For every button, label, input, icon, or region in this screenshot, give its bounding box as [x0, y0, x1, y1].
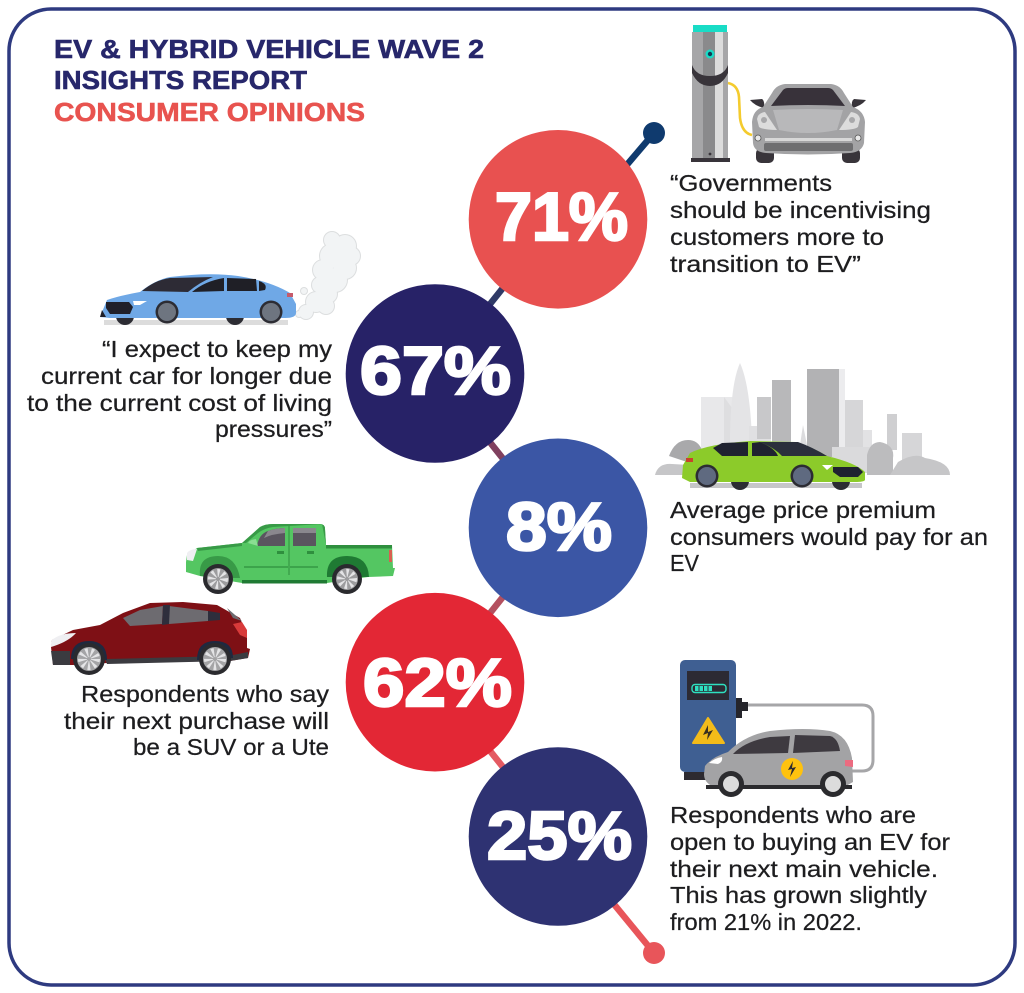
text: keep current car quote: pressures” — [215, 416, 332, 442]
text: average price premium: EV — [670, 550, 700, 576]
blue car — [100, 274, 296, 325]
text: keep current car quote: current car for longer due — [41, 363, 332, 389]
stat circle: 62% — [346, 593, 524, 772]
city skyline — [655, 363, 950, 475]
hatchback car — [704, 729, 853, 797]
icon: charging post with front-view grey car — [691, 25, 866, 163]
text: governments quote: transition to EV” — [670, 251, 861, 277]
text: SUV or Ute — [64, 681, 330, 760]
text: open to buying an EV — [670, 802, 950, 935]
stat circle: 25% — [469, 747, 647, 926]
stat circle: 62%: 62% — [363, 645, 512, 721]
text: governments quote: customers more to — [670, 224, 884, 250]
stat circle: 25%: 25% — [487, 798, 632, 874]
charging post — [691, 25, 730, 162]
title — [54, 34, 484, 127]
title: EV & HYBRID VEHICLE WAVE 2 — [54, 34, 484, 64]
exhaust smoke — [295, 231, 361, 320]
stat circle: 71% — [469, 130, 647, 309]
text: governments quote: should be incentivising — [670, 197, 931, 223]
stat circle: 71%: 71% — [495, 179, 628, 255]
icon: green car in front of city skyline — [655, 363, 950, 490]
title: INSIGHTS REPORT — [54, 65, 307, 95]
stat circle: 67%: 67% — [360, 333, 511, 409]
title: CONSUMER OPINIONS — [54, 97, 365, 127]
icon: blue car with exhaust smoke — [100, 231, 361, 325]
text: keep current car quote — [27, 336, 333, 442]
text: SUV or Ute: their next purchase will — [64, 708, 329, 734]
charging cable — [748, 705, 873, 771]
text: SUV or Ute: be a SUV or a Ute — [133, 734, 329, 760]
charging station — [680, 660, 748, 780]
stat circle: 8%: 8% — [506, 489, 612, 565]
text: SUV or Ute: Respondents who say — [81, 681, 330, 707]
text: open to buying an EV: Respondents who are — [670, 802, 916, 828]
front-view car — [750, 84, 866, 163]
text: open to buying an EV: from 21% in 2022. — [670, 909, 862, 935]
text: governments quote: “Governments — [670, 170, 832, 196]
charging cable — [728, 83, 752, 135]
text: open to buying an EV: This has grown slightly — [670, 882, 928, 908]
green car — [682, 441, 865, 490]
timeline connector line — [435, 122, 665, 964]
icon: dark red SUV — [51, 602, 250, 675]
text: keep current car quote: “I expect to keep my — [102, 336, 333, 362]
icon: green pickup truck — [186, 524, 395, 594]
text: open to buying an EV: their next main vehicle. — [670, 856, 938, 882]
stat circle: 67% — [346, 284, 524, 463]
text: keep current car quote: to the current cost of living — [27, 390, 332, 416]
stat circle: 8% — [469, 438, 647, 617]
text: average price premium: consumers would pay for an — [670, 524, 988, 550]
text: open to buying an EV: open to buying an EV for — [670, 829, 950, 855]
text: average price premium — [670, 497, 988, 576]
text: governments quote — [670, 170, 931, 277]
text: average price premium: Average price premium — [670, 497, 936, 523]
icon: EV charging station with grey hatchback — [680, 660, 873, 797]
